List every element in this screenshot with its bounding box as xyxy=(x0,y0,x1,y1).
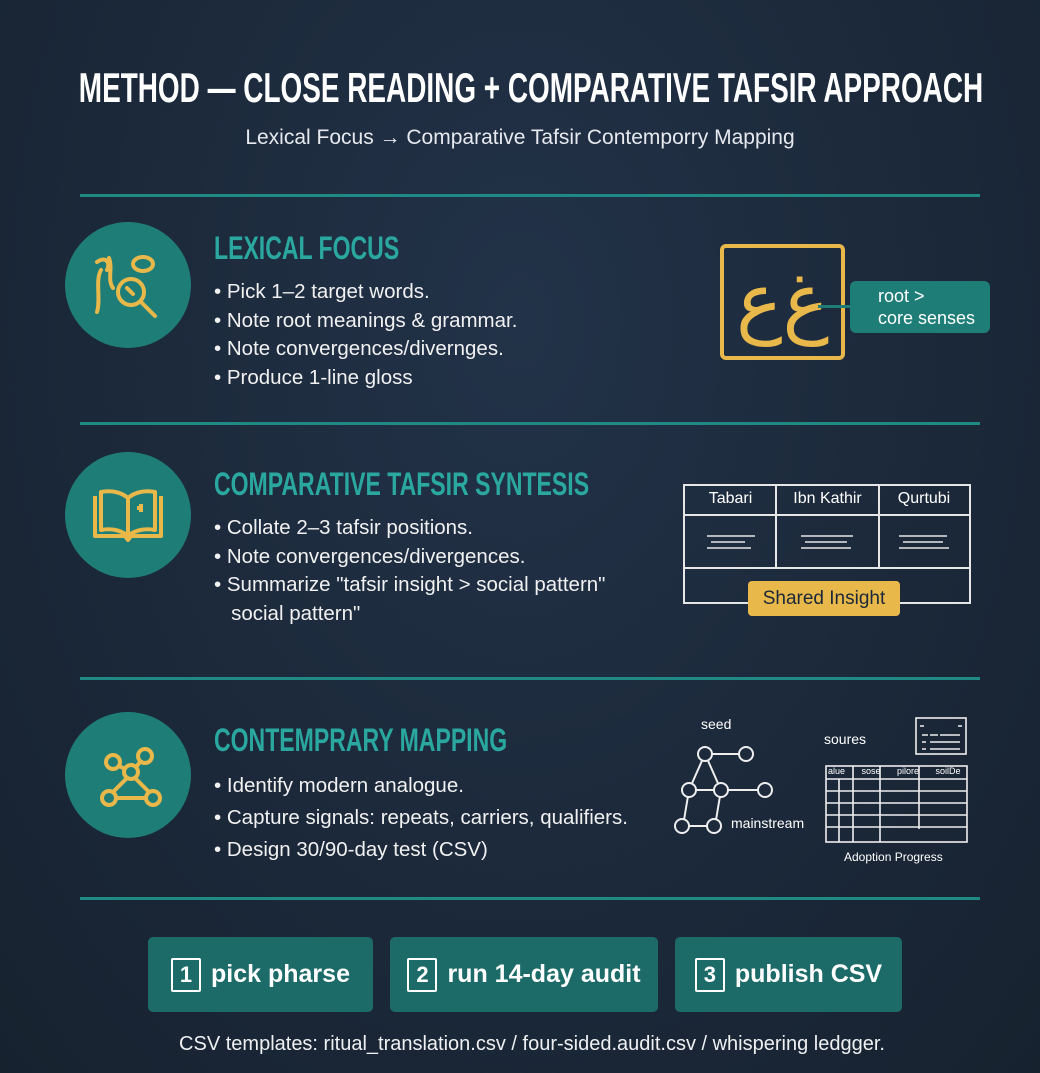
diagram: adoption table xyxy=(824,717,968,864)
bullets: lexical xyxy=(214,280,517,388)
subtitle: Lexical Focus → Comparative Tafsir Contemporry Mapping xyxy=(245,126,795,149)
bullets: comparative: • Collate 2–3 tafsir positions. xyxy=(214,516,473,539)
button: step 3: publish CSV xyxy=(735,960,882,988)
bullets: comparative: • Summarize "tafsir insight > social pattern" xyxy=(214,573,605,596)
bullets: comparative: • Note convergences/divergences. xyxy=(214,544,525,568)
bullets: lexical: • Produce 1-line gloss xyxy=(214,366,413,388)
icon: book xyxy=(65,452,191,578)
badge: shared insight: Shared Insight xyxy=(763,588,885,609)
bullets: lexical: • Note convergences/divernges. xyxy=(214,337,504,360)
button: step 1: 1 xyxy=(180,962,192,986)
bullets: lexical: • Pick 1–2 target words. xyxy=(214,280,430,303)
heading: comparative: COMPARATIVE TAFSIR SYNTESIS xyxy=(214,466,589,502)
diagram: network graph: seed xyxy=(701,716,731,732)
heading: lexical focus: LEXICAL FOCUS xyxy=(214,230,399,266)
bullets: comparative: social pattern" xyxy=(231,602,360,624)
icon: arabic root box: ع‌غ xyxy=(736,257,829,347)
table: tafsir comparison: Qurtubi xyxy=(898,490,950,507)
callout: root senses xyxy=(850,281,990,333)
icon: network xyxy=(65,712,191,838)
bullets: lexical: • Note root meanings & grammar. xyxy=(214,308,517,332)
callout: root senses: root > xyxy=(878,286,925,306)
bullets: contemporary: • Design 30/90-day test (CSV) xyxy=(214,838,488,861)
diagram: network graph: mainstream xyxy=(731,815,804,831)
diagram: adoption table: Adoption Progress xyxy=(844,850,943,864)
diagram: network graph xyxy=(674,716,804,834)
heading: contemporary: CONTEMPRARY MAPPING xyxy=(214,722,507,758)
table: tafsir comparison: Tabari xyxy=(709,490,752,507)
table: tafsir comparison: Ibn Kathir xyxy=(793,490,862,507)
button: step 2: run 14-day audit xyxy=(447,960,641,988)
bullets: contemporary xyxy=(214,774,628,861)
button: step 2 xyxy=(390,937,658,1012)
table: tafsir comparison xyxy=(683,484,971,604)
badge: shared insight xyxy=(748,581,900,616)
button: step 1: pick pharse xyxy=(211,960,350,988)
button: step 2: 2 xyxy=(416,962,429,986)
icon: arabic root box xyxy=(720,244,845,360)
diagram: adoption table: alue sose pilore soilDe xyxy=(828,766,961,776)
icon: lexical magnifier xyxy=(65,222,191,348)
button: step 1 xyxy=(148,937,373,1012)
title: METHOD — CLOSE READING + COMPARATIVE TAFSIR APPROACH xyxy=(79,64,983,111)
bullets: contemporary: • Identify modern analogue. xyxy=(214,774,464,797)
diagram: adoption table: soures xyxy=(824,731,866,747)
bullets: contemporary: • Capture signals: repeats, carriers, qualifiers. xyxy=(214,806,628,829)
footer note: CSV templates: ritual_translation.csv / four-sided.audit.csv / whispering ledgger. xyxy=(179,1033,885,1055)
button: step 3 xyxy=(675,937,902,1012)
callout: root senses: core senses xyxy=(878,308,975,328)
bullets: comparative xyxy=(214,516,605,624)
button: step 3: 3 xyxy=(704,962,716,986)
